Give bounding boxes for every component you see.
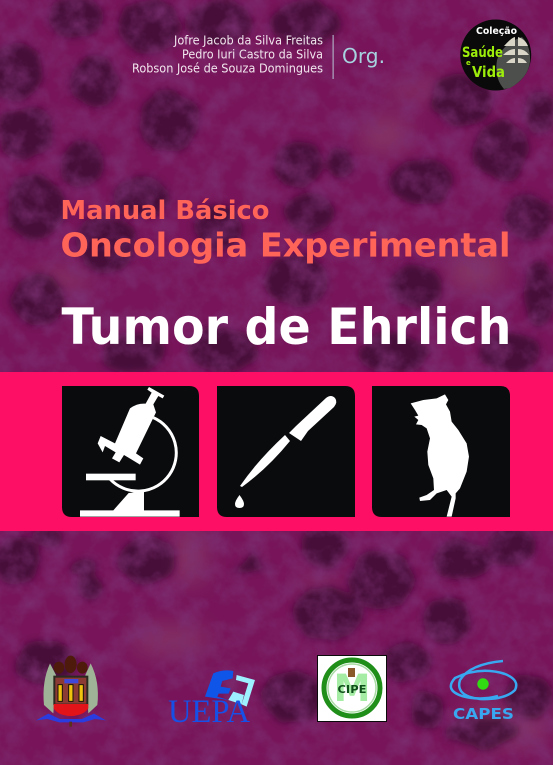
collection badge: e — [466, 59, 471, 67]
logo: UEPA: UEPA — [168, 694, 250, 730]
panel: mouse — [372, 386, 510, 517]
icon: microscope — [80, 387, 180, 517]
panel: dropper — [217, 386, 355, 517]
authors — [132, 32, 323, 76]
subtitle: Manual Básico: Manual Básico — [60, 196, 270, 226]
divider — [333, 35, 334, 79]
authors: Robson José de Souza Domingues — [132, 60, 323, 76]
pink band — [0, 372, 553, 531]
logo: CIPE: CIPE — [338, 683, 366, 696]
logo: CAPES — [451, 661, 516, 723]
logo: university crest — [36, 656, 106, 727]
collection badge: Coleção — [476, 26, 517, 37]
logo: UEPA — [168, 670, 255, 730]
org label: Org. — [342, 44, 385, 68]
icon: mouse — [411, 394, 469, 517]
icon: dropper — [235, 396, 336, 508]
logo: CAPES: CAPES — [453, 705, 514, 723]
title: Tumor de Ehrlich: Tumor de Ehrlich — [62, 298, 512, 356]
logo: CIPE: M — [334, 667, 370, 710]
subtitle: Oncologia Experimental: Oncologia Experimental — [60, 226, 511, 264]
panel: microscope — [62, 386, 199, 517]
collection badge: Vida — [472, 63, 505, 81]
authors: Jofre Jacob da Silva Freitas — [173, 32, 323, 48]
collection badge — [460, 20, 531, 90]
logo: CIPE — [318, 656, 386, 722]
authors: Pedro Iuri Castro da Silva — [182, 46, 323, 62]
collection badge: Saúde — [462, 45, 503, 61]
